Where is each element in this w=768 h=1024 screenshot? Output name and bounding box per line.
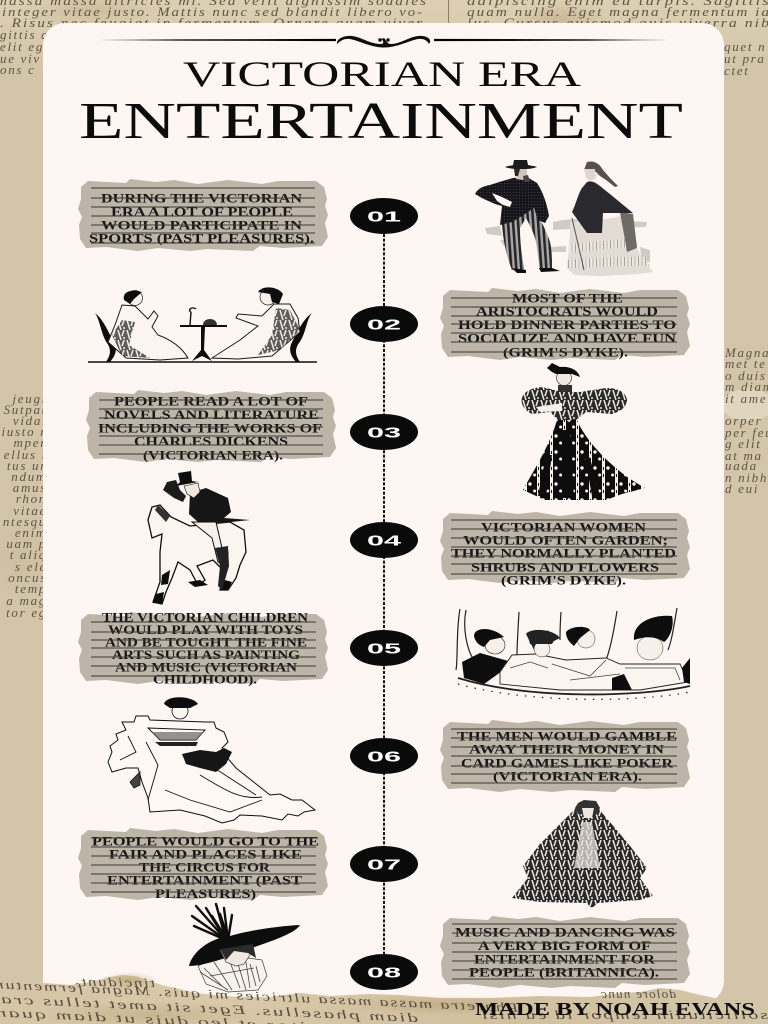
text card 08: ENTERTAINMENT FOR (474, 952, 656, 966)
text card 04: VICTORIAN WOMEN (481, 520, 647, 534)
illustration 07: ornate gown (512, 800, 653, 908)
text card 07: PEOPLE WOULD GO TO THE (92, 834, 319, 848)
newspaper text: top: integer vitae justo. Mattis nunc sed blandit libero vo- (2, 4, 424, 19)
step 03 marker: 03 (367, 424, 401, 442)
text card 06 (440, 720, 690, 792)
text card 05 (78, 610, 328, 686)
step 04 marker: 04 (367, 532, 402, 550)
text card 08: A VERY BIG FORM OF (478, 938, 651, 953)
title: Victorian Era: VICTORIAN ERA (183, 54, 581, 94)
newspaper text: left margin: mper (13, 435, 47, 450)
text card 06: THE MEN WOULD GAMBLE (457, 728, 677, 744)
text card 07: PLEASURES) (155, 886, 256, 901)
newspaper text: top: elit eg (0, 39, 44, 54)
text card 04: WOULD OFTEN GARDEN; (463, 532, 668, 548)
newspaper text: left margin: rhon (16, 491, 47, 506)
newspaper text: right margin: orper (725, 413, 762, 428)
text card 03: PEOPLE READ A LOT OF (114, 394, 308, 408)
text card 04: (GRIM'S DYKE). (501, 572, 626, 588)
step 08 marker: 08 (367, 964, 401, 982)
step 05 marker (350, 630, 418, 666)
text card 05: AND MUSIC (VICTORIAN (115, 660, 298, 674)
text card 02: MOST OF THE (512, 290, 623, 306)
text card 01: ERA A LOT OF PEOPLE (111, 204, 293, 219)
torn paper strip: dolore nunc (600, 987, 676, 1001)
illustration 03: woman in patterned gown (522, 363, 645, 500)
torn paper strip: tincidunt (80, 975, 155, 990)
newspaper text: right margin: d eui (725, 481, 759, 496)
newspaper text: right margin: uada (725, 458, 758, 473)
text card 05: THE VICTORIAN CHILDREN (102, 610, 309, 624)
title: Entertainment: ENTERTAINMENT (79, 93, 683, 150)
text card 01: SPORTS (PAST PLEASURES). (89, 230, 314, 246)
torn paper strip (0, 972, 768, 1024)
top ornament divider (98, 36, 669, 48)
newspaper text: left margin: tor eg (6, 605, 47, 620)
text card 02: (GRIM'S DYKE). (503, 344, 628, 360)
step 02 marker: 02 (367, 316, 401, 334)
newspaper text: left margin: iusto r (2, 424, 47, 439)
newspaper text: left margin: uam p (6, 536, 47, 551)
newspaper text: top: quet n (724, 39, 766, 54)
newspaper text: left margin: Sutpat (4, 402, 47, 417)
newspaper text: left margin: vitae (13, 503, 47, 518)
credit line: MADE BY NOAH EVANS (475, 999, 755, 1019)
newspaper text: left margin: enim (15, 525, 47, 540)
newspaper text: left margin: temp (15, 581, 47, 596)
newspaper text: top: ons c (0, 62, 36, 77)
newspaper text: left margin: t aliq (10, 547, 47, 562)
torn paper strip: Pharetra massa massa ultricies mi quis. Magna fermentum (0, 977, 520, 1015)
text card 04: SHRUBS AND FLOWERS (471, 560, 659, 574)
step 01 marker: 01 (367, 208, 401, 226)
text card 03: (VICTORIAN ERA). (143, 448, 283, 462)
text card 07: FAIR AND PLACES LIKE (109, 846, 302, 862)
newspaper text: left margin: ntesqu (3, 514, 47, 529)
text card 05: WOULD PLAY WITH TOYS (108, 622, 303, 637)
newspaper text: right margin: n nibh (725, 470, 768, 485)
newspaper text: top: quam nulla. Eget magna fermentum ia (467, 4, 768, 19)
newspaper text: right margin: g elit (725, 436, 762, 451)
torn paper strip: sollicitudin tempor id eu nisl (480, 1008, 768, 1022)
text card 07: ENTERTAINMENT (PAST (107, 872, 302, 888)
newspaper text: top: ue viv (0, 51, 41, 66)
text card 03: INCLUDING THE WORKS OF (98, 420, 322, 436)
newspaper text: left margin: ellus i (4, 447, 47, 462)
step 06 marker: 06 (367, 748, 401, 766)
text card 01: WOULD PARTICIPATE IN (101, 218, 303, 232)
newspaper text: top: gittis a (0, 27, 49, 42)
newspaper text: right margin: o duis (725, 368, 767, 383)
newspaper text: right margin: at ma (725, 448, 763, 463)
step 04 marker (350, 522, 418, 558)
text card 01: DURING THE VICTORIAN (101, 190, 303, 206)
text card 04: THEY NORMALLY PLANTED (451, 546, 676, 560)
step 02 marker (350, 306, 418, 342)
text card 05: AND BE TOUGHT THE FINE (105, 634, 307, 650)
text card 02: HOLD DINNER PARTIES TO (458, 317, 676, 332)
text card 03 (86, 390, 336, 462)
newspaper text: top: ctet (724, 63, 750, 78)
newspaper text: left margin: ndum (11, 469, 47, 484)
illustration 02: tea party (88, 287, 317, 362)
newspaper text: right margin: met te (725, 356, 767, 371)
newspaper text: left margin: tus ur (7, 458, 47, 473)
newspaper text: top (0, 0, 768, 78)
illustration 05: ladies in theatre box (456, 608, 690, 699)
step 07 marker (350, 846, 418, 882)
text card 07: THE CIRCUS FOR (139, 860, 271, 874)
text card 08: PEOPLE (BRITANNICA). (469, 964, 659, 980)
newspaper text: top: . Risus nec feugiat in fermentum. Ornare quam viver (0, 15, 424, 30)
text card 06: (VICTORIAN ERA). (493, 768, 642, 784)
text card 06: AWAY THEIR MONEY IN (469, 742, 665, 756)
newspaper text: top: lus. Cursus euismod quis viverra nib (467, 15, 768, 30)
newspaper text: left margin: s ele (15, 559, 47, 574)
text card 01 (78, 179, 328, 251)
text card 02: ARISTOCRATS WOULD (476, 304, 658, 318)
text card 02 (440, 288, 690, 360)
text card 07 (78, 828, 328, 901)
text card 08 (440, 916, 690, 988)
newspaper text: top: ut pra (724, 51, 766, 66)
illustration 08: lady in feathered hat (189, 904, 300, 992)
text card 03: NOVELS AND LITERATURE (104, 407, 319, 422)
step 07 marker: 07 (367, 856, 401, 874)
step 01 marker (350, 198, 418, 234)
step 03 marker (350, 414, 418, 450)
text card 06: CARD GAMES LIKE POKER (461, 756, 674, 770)
newspaper text: left margin (2, 391, 47, 620)
newspaper text: left margin: amus (13, 480, 47, 495)
step 05 marker: 05 (367, 640, 401, 658)
text card 02: SOCIALIZE AND HAVE FUN (458, 330, 677, 346)
newspaper text: left margin: a mag (6, 593, 47, 608)
text card 03: CHARLES DICKENS (134, 434, 288, 448)
newspaper text: left margin: jeugi (10, 391, 47, 406)
illustration 01: strolling couple (475, 160, 653, 276)
illustration 06: lady in flowing gown (108, 697, 315, 823)
newspaper text: right margin (724, 345, 768, 496)
dashed timeline (383, 234, 385, 955)
step 08 marker (350, 954, 418, 990)
text card 04 (440, 511, 690, 588)
newspaper text: left margin: vida. (13, 413, 47, 428)
text card 05: CHILDHOOD). (153, 672, 257, 686)
illustration 04: rider on horse (148, 471, 250, 604)
newspaper text: left margin: oncus (8, 570, 47, 585)
text card 08: MUSIC AND DANCING WAS (455, 924, 675, 940)
text card 05: ARTS SUCH AS PAINTING (112, 647, 300, 662)
step 06 marker (350, 738, 418, 774)
